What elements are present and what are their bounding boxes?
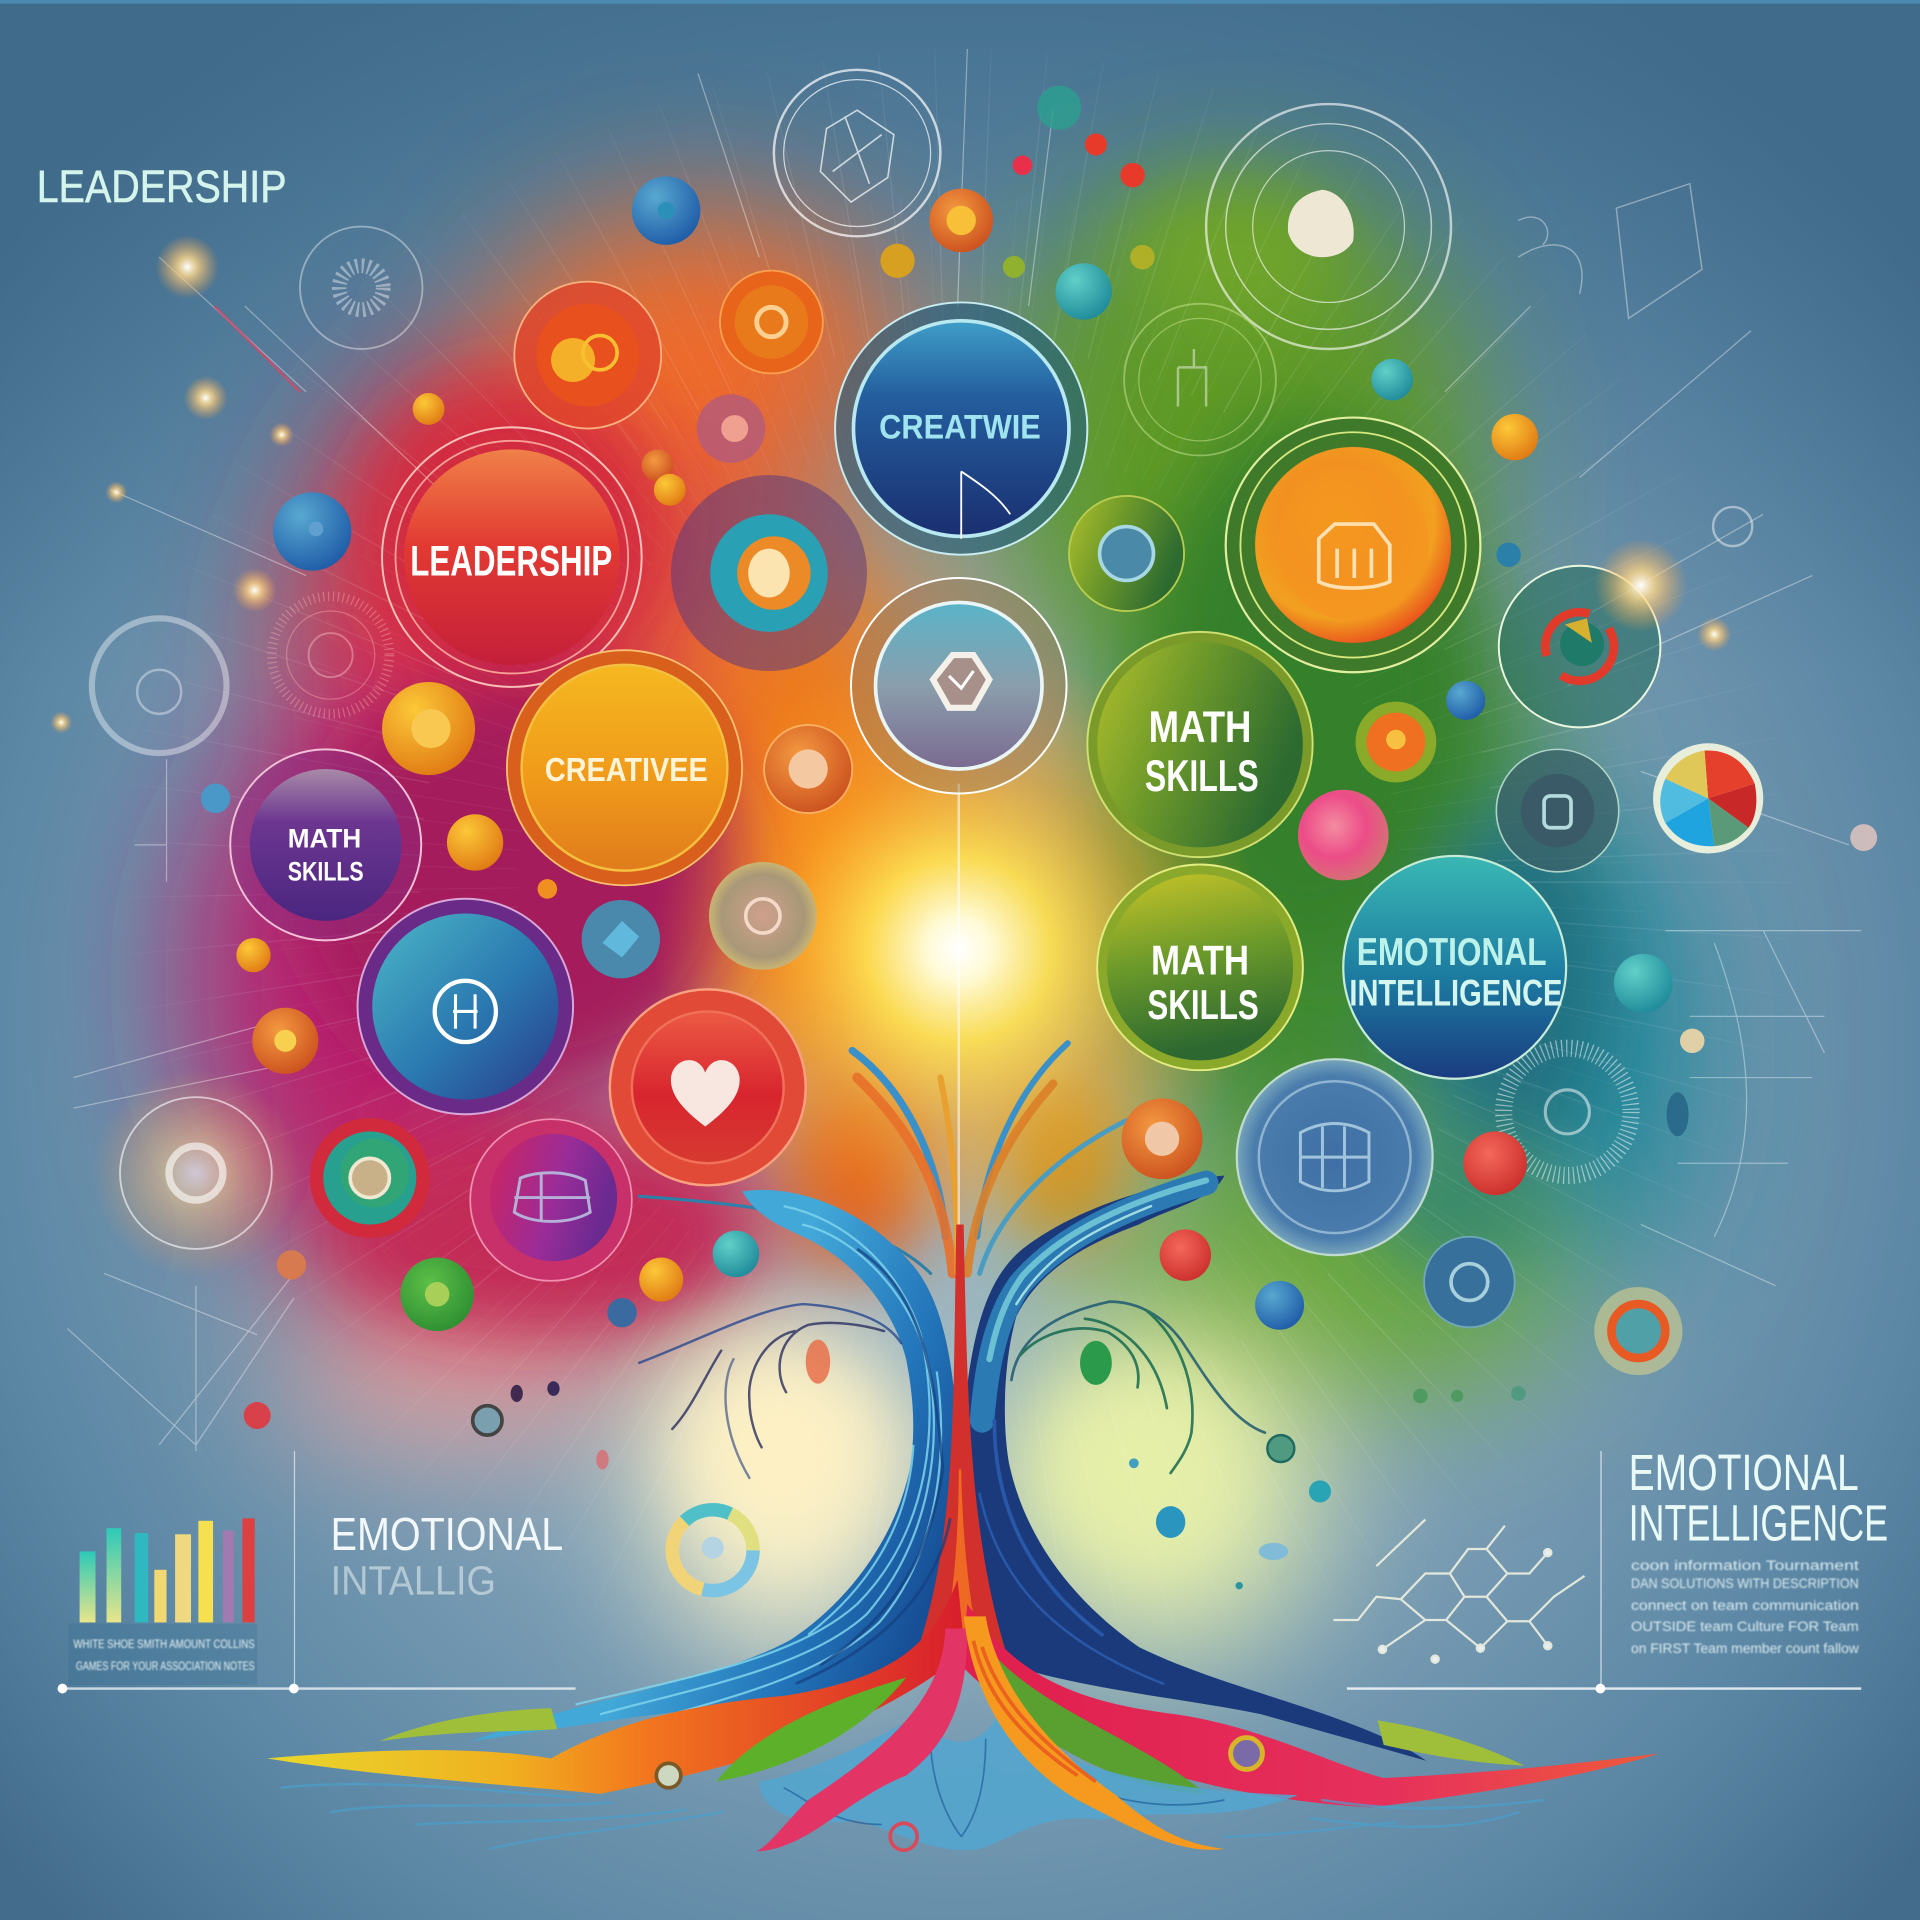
bubble: purple math skills [230, 749, 421, 940]
baseline and dividers [58, 1451, 1861, 1693]
bubble: math skills top: MATH [1149, 703, 1251, 752]
sparkles [50, 235, 1731, 733]
branches and trunk [267, 784, 1659, 1851]
left green leaf [716, 1678, 906, 1782]
bubble: glass checkmark [851, 578, 1067, 793]
chart caption: WHITE SHOE SMITH AMOUNT COLLINS [73, 1638, 255, 1651]
radiating rays [273, 196, 1644, 1567]
sun glow [653, 643, 1265, 1255]
orange root [964, 1616, 1224, 1850]
body text right: connect on team communication [1631, 1597, 1859, 1613]
body text right [1631, 1557, 1860, 1656]
red pattern circle [272, 596, 389, 714]
left outline circle [92, 618, 227, 753]
canopy colour wash [184, 184, 1702, 1653]
chart caption: GAMES FOR YOUR ASSOCIATION NOTES [76, 1660, 255, 1673]
green outline circle [1124, 304, 1276, 456]
bottom blue roots [759, 1714, 1298, 1850]
pink root [757, 1629, 967, 1851]
bubble: teal and orange icon [671, 475, 867, 671]
bubble: orange top left [514, 282, 661, 429]
large top-right outline circle [1206, 104, 1451, 349]
body text right: on FIRST Team member count fallow [1631, 1640, 1860, 1656]
chart icon: pie [1653, 743, 1763, 853]
body text right: OUTSIDE team Culture FOR Team [1631, 1618, 1859, 1634]
bubble: emotional intelligence: INTELLIGENCE [1349, 972, 1562, 1013]
bubble: math skills lower: SKILLS [1147, 981, 1259, 1028]
bubble: emotional intelligence [1343, 856, 1566, 1079]
glowing left circle [92, 1069, 300, 1277]
twigs left [639, 1304, 901, 1478]
trunk left blue mass [471, 1190, 960, 1741]
icon: heart [671, 1060, 740, 1127]
label: emotional intelligence left: EMOTIONAL [331, 1508, 563, 1560]
bubble: gold icon [1226, 418, 1480, 672]
bubble: math skills top: SKILLS [1145, 752, 1259, 801]
bubble: dark glass right [1496, 749, 1619, 872]
body text right: coon information Tournament [1631, 1557, 1859, 1573]
bubble: creative orange [507, 650, 742, 885]
glass outline rings [92, 70, 1752, 1176]
leaves and seeds [473, 1340, 1526, 1589]
bubble: creative blue: CREATWIE [879, 408, 1041, 446]
top-left outline circle [300, 227, 422, 349]
trunk centre line [958, 784, 960, 1224]
bubble: math skills lower [1097, 864, 1303, 1070]
body text right: DAN SOLUTIONS WITH DESCRIPTION [1631, 1575, 1859, 1591]
right branch blue overlay [980, 1180, 1206, 1684]
label: emotional intelligence right [1629, 1443, 1888, 1551]
label: emotional intelligence left [331, 1508, 563, 1603]
bubble: purple math skills: SKILLS [288, 856, 364, 886]
trunk strand highlights [576, 1206, 941, 1724]
bubble: math skills lower: MATH [1151, 937, 1249, 984]
bubble: blue-grey icon [1237, 1059, 1433, 1255]
top outline circle [774, 70, 940, 236]
lower-right pattern circle [1504, 1048, 1631, 1176]
bubble: magenta icon [470, 1119, 632, 1281]
bubble: creative orange: CREATIVEE [545, 752, 708, 789]
twigs right [1011, 1302, 1265, 1473]
bubble: leadership: LEADERSHIP [410, 538, 612, 586]
hexagon network [1333, 1520, 1584, 1663]
trunk right navy mass [960, 1176, 1427, 1761]
right green leaf [996, 1659, 1206, 1794]
chart caption [73, 1638, 255, 1673]
right pink band [961, 1604, 1659, 1807]
heading: leadership: LEADERSHIP [37, 161, 287, 212]
bubble: leadership [382, 427, 642, 687]
bubble: emotional intelligence: EMOTIONAL [1357, 931, 1547, 974]
left red band [267, 1580, 965, 1794]
left chart scribble [67, 49, 1861, 1451]
bubble: orange top [720, 271, 823, 373]
bubble: creative blue [835, 302, 1087, 555]
cream nugget [1288, 190, 1354, 257]
bubble: purple math skills: MATH [288, 823, 361, 853]
right side scribble circle [1713, 507, 1752, 546]
peacock eyes [656, 1738, 1262, 1850]
bubble: blue icon [358, 899, 573, 1114]
small orbs [201, 86, 1877, 1429]
trunk red and orange core [912, 1224, 1010, 1665]
icon: colour donut [672, 1510, 753, 1591]
bubble: math skills top [1087, 632, 1313, 857]
upper fan strands [639, 1043, 1127, 1273]
bubble: green icon [1069, 496, 1184, 611]
skill bubbles [201, 86, 1877, 1429]
label: emotional intelligence left: INTALLIG [331, 1557, 496, 1603]
bubble: red heart [610, 989, 806, 1185]
bubble: multicolour ring [1499, 566, 1660, 727]
side yellow and green tips [380, 1708, 1524, 1766]
bar chart [69, 1518, 257, 1685]
